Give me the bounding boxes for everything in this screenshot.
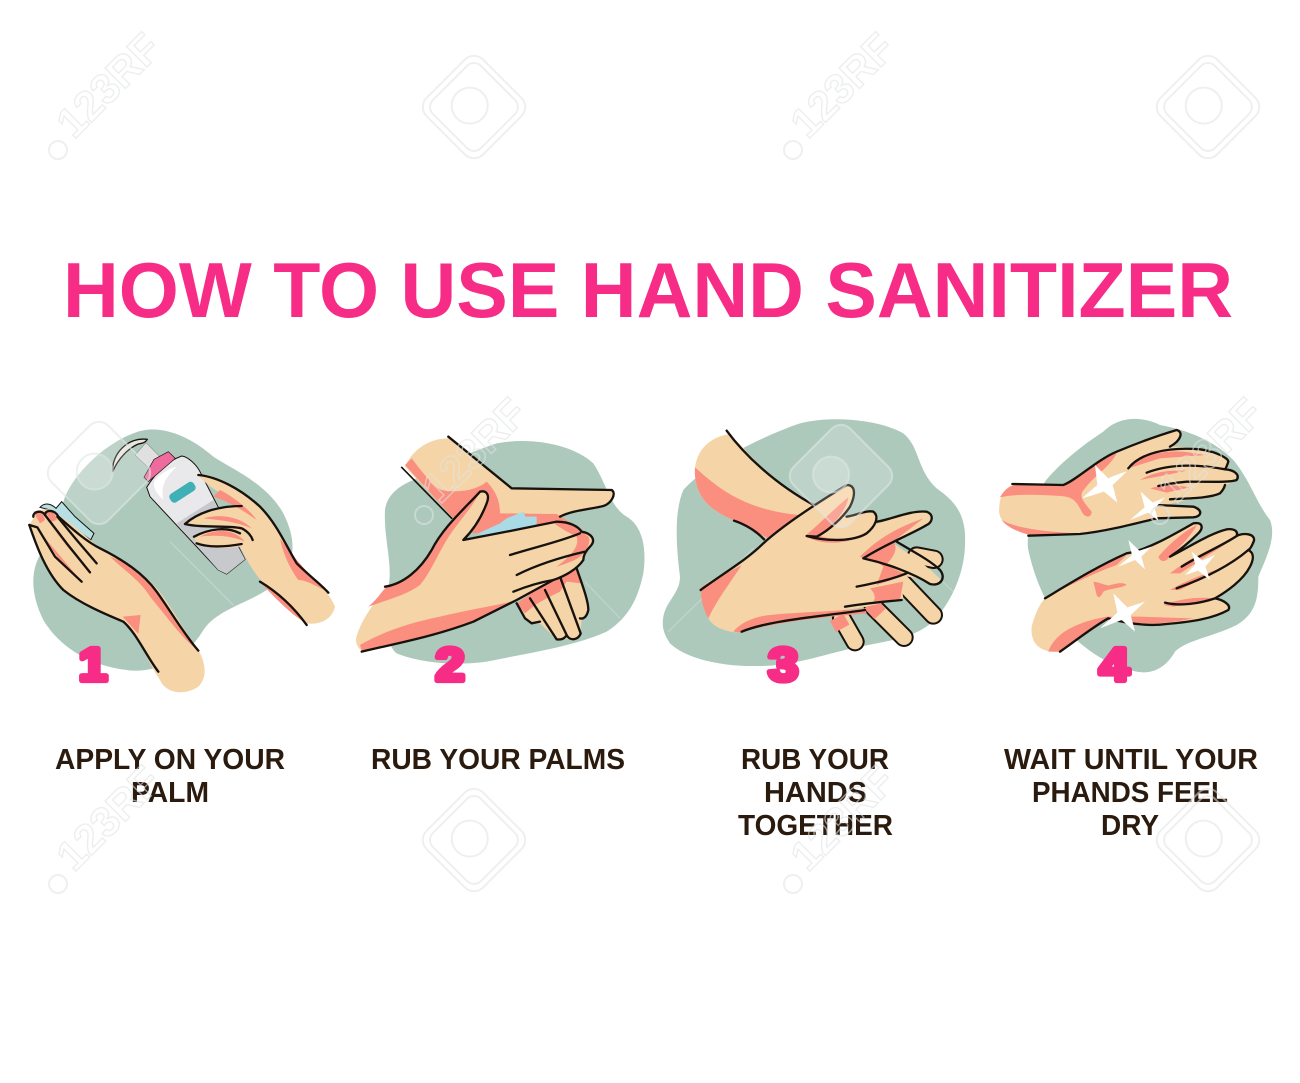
blob background 2 (385, 441, 644, 664)
back fingers (837, 556, 934, 642)
caption: step 4: DRY (1101, 810, 1159, 842)
caption: step 4: PHANDS FEEL (1032, 777, 1228, 809)
caption: step 1: APPLY ON YOUR (55, 744, 285, 776)
caption: step 1: PALM (131, 777, 209, 809)
caption: step 3: HANDS (764, 777, 867, 809)
title: HOW TO USE HAND SANITIZER (63, 246, 1233, 334)
blob background 3 (663, 419, 965, 666)
number 2: 2 (435, 639, 465, 691)
left hand palm with gel (29, 502, 205, 692)
upper hand (999, 430, 1238, 536)
watermark labels with camera badges: 123RF (47, 757, 170, 879)
watermark labels with camera badges: 123RF (413, 389, 536, 511)
back arm (695, 431, 817, 540)
panel: step 4 wait until dry (999, 419, 1272, 691)
caption: step 4: WAIT UNTIL YOUR (1004, 744, 1258, 776)
lower fingers (517, 568, 588, 641)
caption: step 3: TOGETHER (738, 810, 893, 842)
watermark labels with camera badges: 123RF (1149, 389, 1272, 511)
panel: step 2 rub palms (356, 437, 644, 691)
number 4: 4 (1099, 638, 1129, 691)
caption: step 3: RUB YOUR (741, 744, 889, 776)
number 1: 1 (79, 640, 107, 691)
blob background 1 (33, 429, 292, 671)
blob background 4 (1028, 419, 1272, 672)
caption: step 3 (738, 744, 893, 842)
pump dispenser (113, 439, 159, 472)
gel between palms (478, 512, 537, 536)
watermark labels with camera badges (47, 24, 1272, 893)
front hand (356, 491, 593, 652)
right hand holding bottle (185, 475, 335, 625)
bottle (144, 452, 245, 574)
caption: step 2: RUB YOUR PALMS (371, 744, 625, 776)
number 3: 3 (768, 638, 798, 691)
caption: step 1 (55, 744, 285, 809)
gel on palm (40, 502, 94, 540)
panel: step 3 rub hands together (663, 419, 965, 691)
lower hand (1031, 523, 1254, 652)
front hand (701, 485, 943, 633)
caption: step 4 (1004, 744, 1258, 842)
watermark labels with camera badges: 123RF (47, 24, 170, 146)
panel: step 1 apply on palm (29, 429, 335, 692)
watermark labels with camera badges: 123RF (781, 24, 904, 146)
watermark stamps (42, 50, 1265, 897)
sparkles (1082, 465, 1215, 632)
back hand (402, 437, 614, 533)
watermark labels with camera badges: 123RF (781, 757, 904, 879)
